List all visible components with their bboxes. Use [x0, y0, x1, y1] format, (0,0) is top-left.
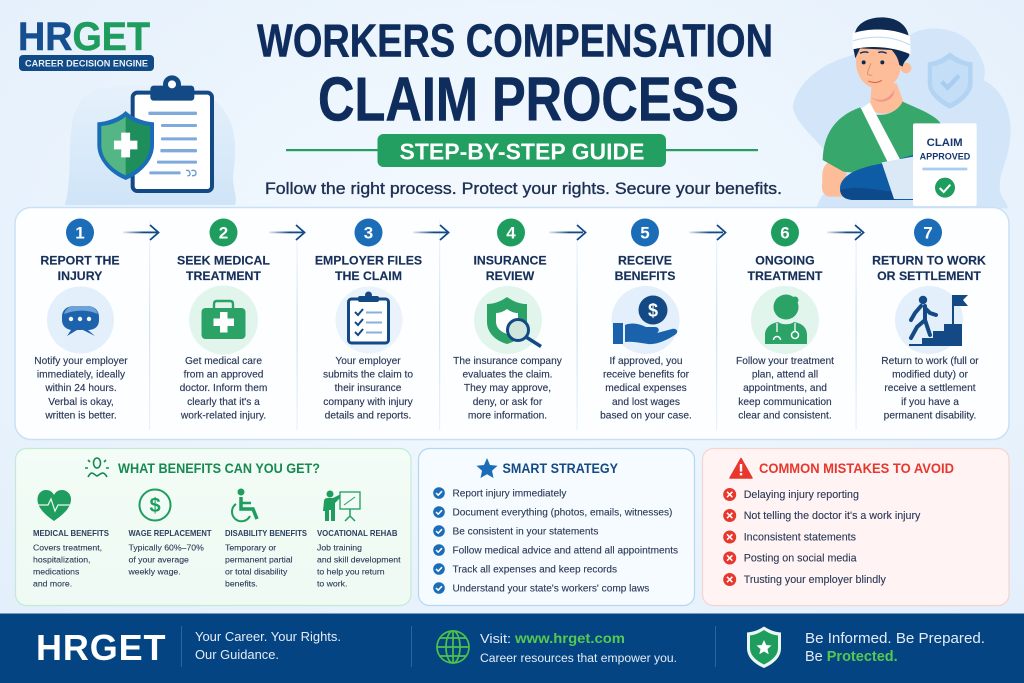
heading: common mistakes: COMMON MISTAKES TO AVOID	[759, 461, 954, 476]
step 7: return to work or settlement: if you have a	[901, 397, 959, 408]
step 7: return to work or settlement: permanent disability.	[884, 410, 976, 422]
step 2: seek medical treatment: Get medical care	[185, 356, 262, 367]
icon: footer shield	[747, 626, 781, 668]
icon: warning triangle	[730, 458, 752, 478]
step 2: seek medical treatment: 2	[219, 224, 228, 242]
step 5: receive benefits: based on your case.	[600, 410, 692, 422]
benefit: disability: permanent partial	[225, 554, 293, 564]
benefit: medical: MEDICAL BENEFITS	[33, 528, 109, 538]
step 1: report the injury: INJURY	[58, 269, 102, 283]
benefit: disability: DISABILITY BENEFITS	[225, 528, 307, 538]
step 1: report the injury: 1	[75, 224, 85, 242]
illustration: injured worker with claim approved card	[793, 17, 1011, 208]
illustration: clipboard with medical shield	[65, 75, 236, 205]
step 3: employer files the claim: company with injury	[323, 397, 414, 408]
step 4: insurance review: The insurance company	[453, 356, 563, 367]
benefit: wage replacement	[128, 490, 212, 576]
footer motto: Be Protected.	[805, 649, 898, 665]
panel: seven-step process	[15, 208, 1009, 440]
step 5: receive benefits: BENEFITS	[615, 269, 675, 283]
tagline: Follow the right process. Protect your rights. Secure your benefits.	[265, 180, 782, 198]
step 6: ongoing treatment: ONGOING	[755, 254, 815, 268]
list: mistakes: Trusting your employer blindly	[744, 574, 887, 586]
footer website: Career resources that empower you.	[480, 653, 677, 665]
benefit: wage replacement: weekly wage.	[128, 566, 181, 576]
checklist: strategies: Track all expenses and keep records	[452, 564, 617, 576]
benefit: medical: Covers treatment,	[33, 542, 102, 552]
footer website: www.hrget.com	[514, 631, 625, 646]
step 4: insurance review: INSURANCE	[473, 254, 547, 268]
step 1: report the injury: Notify your employer	[34, 356, 128, 367]
step 7: return to work or settlement: Return to work (full or	[881, 356, 979, 367]
footer slogan: Our Guidance.	[195, 648, 279, 662]
subtitle badge: step-by-step guide	[286, 134, 758, 167]
step 5: receive benefits: $	[648, 300, 658, 320]
step 6: ongoing treatment: appointments, and	[743, 383, 827, 394]
title: WORKERS COMPENSATION	[257, 14, 773, 66]
step 7: return to work or settlement: modified duty) or	[892, 370, 969, 380]
step 7: return to work or settlement: RETURN TO WORK	[872, 254, 986, 268]
step 5: receive benefits: 5	[640, 224, 650, 242]
step 2: seek medical treatment: from an approved	[184, 370, 264, 380]
icon: globe	[437, 631, 469, 663]
list: mistakes	[723, 488, 921, 586]
step 2: seek medical treatment	[177, 218, 270, 422]
checklist: strategies: Be consistent in your statements	[452, 526, 598, 538]
step 1: report the injury: immediately, ideally	[37, 370, 126, 380]
footer slogan: Your Career. Your Rights.	[195, 630, 341, 644]
benefit: wage replacement: $	[149, 495, 161, 517]
step 3: employer files the claim: submits the claim to	[323, 370, 413, 380]
step 6: ongoing treatment: TREATMENT	[748, 269, 823, 283]
footer motto	[805, 631, 985, 665]
arrow: step 4 to 5	[549, 225, 586, 240]
benefit: wage replacement: of your average	[128, 554, 189, 564]
benefit: disability: Temporary or	[225, 542, 276, 552]
benefit: wage replacement: Typically 60%–70%	[128, 542, 204, 552]
footer website	[480, 631, 677, 665]
step 7: return to work or settlement: OR SETTLEMENT	[877, 269, 981, 283]
step 6: ongoing treatment	[736, 218, 834, 422]
step 5: receive benefits	[600, 218, 692, 422]
panel: smart strategy	[418, 448, 694, 606]
step 1: report the injury	[34, 218, 128, 422]
icon: benefits person	[85, 458, 109, 477]
benefit: wage replacement: WAGE REPLACEMENT	[128, 528, 212, 538]
logo: HRGET: HRGET	[18, 15, 150, 59]
step 1: report the injury: REPORT THE	[40, 254, 120, 268]
benefit: vocational rehab: and skill development	[317, 554, 401, 564]
illustration: injured worker with claim approved card: CLAIM	[927, 137, 963, 149]
step 4: insurance review: They may approve,	[464, 383, 551, 394]
step 5: receive benefits: medical expenses	[605, 383, 687, 394]
step 2: seek medical treatment: work-related injury.	[180, 410, 266, 422]
title: CLAIM PROCESS	[318, 66, 739, 134]
benefit: disability: or total disability	[225, 566, 288, 576]
footer website: Visit:	[480, 631, 511, 646]
heading: smart strategy: SMART STRATEGY	[502, 461, 618, 476]
list: mistakes: Posting on social media	[744, 552, 857, 564]
list: mistakes: Delaying injury reporting	[744, 489, 859, 501]
step 3: employer files the claim: 3	[364, 224, 373, 242]
step 4: insurance review: deny, or ask for	[473, 397, 543, 408]
step 5: receive benefits: receive benefits for	[603, 370, 690, 380]
benefit: disability	[225, 488, 307, 588]
step 4: insurance review: more information.	[468, 410, 547, 422]
benefit: vocational rehab: VOCATIONAL REHAB	[317, 528, 398, 538]
benefit: vocational rehab: Job training	[317, 542, 362, 552]
benefit: disability: benefits.	[225, 578, 258, 588]
arrow: step 6 to 7	[827, 225, 864, 240]
step 2: seek medical treatment: clearly that it's a	[187, 397, 260, 408]
panel: common mistakes to avoid	[702, 448, 1009, 606]
step 7: return to work or settlement: receive a settlement	[884, 383, 976, 394]
benefit: medical: hospitalization,	[33, 554, 90, 564]
footer band	[0, 614, 1024, 683]
step 5: receive benefits: and lost wages	[612, 397, 680, 408]
icon: star	[476, 458, 498, 478]
checklist: strategies	[433, 487, 678, 594]
arrow: step 3 to 4	[413, 225, 448, 240]
step 6: ongoing treatment: plan, attend all	[752, 370, 818, 380]
benefit: medical	[33, 490, 109, 588]
list: mistakes: Inconsistent statements	[744, 532, 856, 544]
arrow: step 5 to 6	[689, 225, 726, 240]
step 4: insurance review: REVIEW	[486, 269, 535, 283]
step 5: receive benefits: RECEIVE	[618, 254, 672, 268]
step 3: employer files the claim: details and reports.	[325, 410, 411, 422]
step 4: insurance review: evaluates the claim.	[462, 370, 553, 380]
benefit: medical: and more.	[33, 578, 72, 588]
step 1: report the injury: Verbal is okay,	[48, 397, 114, 408]
step 6: ongoing treatment: 6	[780, 224, 790, 242]
arrow: step 1 to 2	[123, 225, 158, 240]
step 1: report the injury: within 24 hours.	[44, 383, 117, 394]
step 4: insurance review	[453, 218, 563, 422]
illustration: injured worker with claim approved card: APPROVED	[920, 151, 971, 161]
step 7: return to work or settlement: 7	[923, 224, 933, 242]
checklist: strategies: Understand your state's workers' comp laws	[452, 584, 649, 594]
benefit: vocational rehab	[317, 490, 401, 588]
checklist: strategies: Report injury immediately	[452, 488, 567, 500]
step 3: employer files the claim: their insurance	[335, 383, 402, 394]
step 6: ongoing treatment: keep communication	[738, 397, 832, 408]
list: mistakes: Not telling the doctor it's a work injury	[744, 510, 921, 522]
step 6: ongoing treatment: clear and consistent.	[738, 410, 832, 422]
arrow: step 2 to 3	[269, 225, 304, 240]
footer slogan	[195, 630, 341, 662]
checklist: strategies: Follow medical advice and attend all appointments	[452, 546, 678, 556]
heading: what benefits: WHAT BENEFITS CAN YOU GET?	[118, 460, 320, 476]
step 3: employer files the claim: THE CLAIM	[335, 269, 402, 283]
step 2: seek medical treatment: TREATMENT	[186, 269, 261, 283]
benefit: vocational rehab: to help you return	[317, 566, 385, 576]
checklist: strategies: Document everything (photos, emails, witnesses)	[452, 508, 672, 518]
footer logo: HRGET	[36, 627, 166, 668]
subtitle badge: step-by-step guide: STEP-BY-STEP GUIDE	[400, 138, 644, 164]
step 6: ongoing treatment: Follow your treatment	[736, 356, 834, 367]
step 3: employer files the claim	[315, 218, 422, 422]
benefit: medical: medications	[33, 566, 80, 576]
step 7: return to work or settlement	[872, 218, 986, 422]
logo: HRGET: CAREER DECISION ENGINE	[25, 58, 148, 68]
step 2: seek medical treatment: SEEK MEDICAL	[177, 254, 270, 268]
step 1: report the injury: written is better.	[44, 410, 117, 422]
footer motto: Be Informed. Be Prepared.	[805, 631, 985, 647]
step 4: insurance review: 4	[506, 224, 516, 242]
step 2: seek medical treatment: doctor. Inform them	[180, 383, 267, 394]
title	[257, 14, 773, 134]
benefit: vocational rehab: to work.	[317, 578, 347, 588]
step 3: employer files the claim: Your employer	[335, 356, 401, 367]
panel: what benefits can you get	[16, 448, 411, 606]
step 3: employer files the claim: EMPLOYER FILES	[315, 254, 422, 268]
step 5: receive benefits: If approved, you	[609, 356, 683, 367]
